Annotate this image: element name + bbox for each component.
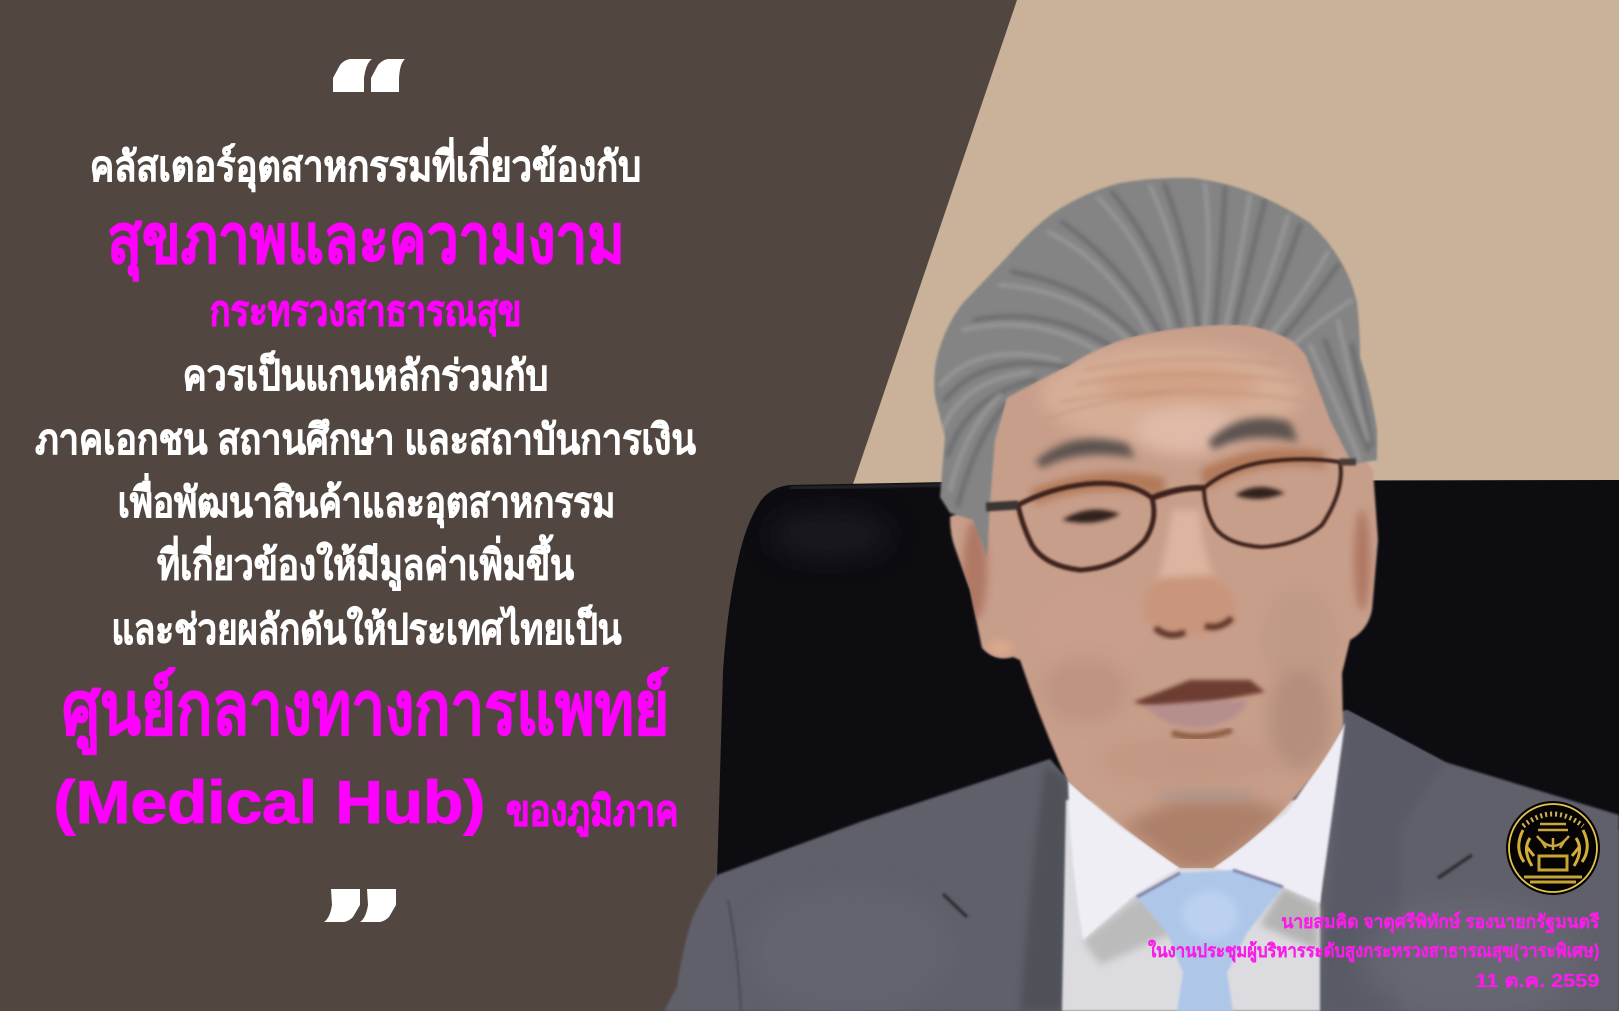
line 6: เพื่อพัฒนาสินค้าและอุตสาหกรรม <box>118 472 615 528</box>
necktie <box>1137 870 1283 1011</box>
seal base <box>1524 856 1582 882</box>
suit <box>664 705 1619 1011</box>
line 10: Medical Hub: (Medical Hub) <box>54 769 485 836</box>
line 10: region: ของภูมิภาค <box>506 788 678 837</box>
line 8: และช่วยผลักดันให้ประเทศไทยเป็น <box>112 603 622 652</box>
eyes <box>1062 487 1285 523</box>
caption: speaker and event <box>1148 911 1599 991</box>
photo: deputy prime minister portrait <box>664 178 1619 1011</box>
line 3: ministry: กระทรวงสาธารณสุข <box>210 288 521 337</box>
shirt <box>1062 723 1345 1011</box>
opening quotation mark <box>333 59 405 92</box>
mouth <box>1133 680 1265 737</box>
eyeglasses <box>986 459 1356 570</box>
face and ears <box>950 290 1378 870</box>
background: beige diagonal panel <box>851 0 1619 490</box>
caption line 1: นายสมคิด จาตุศรีพิทักษ์ รองนายกรัฐมนตรี <box>1281 911 1599 934</box>
line 9: highlight: ศูนย์กลางทางการแพทย์ <box>62 667 669 755</box>
caption line 3: date: 11 ต.ค. 2559 <box>1475 970 1599 991</box>
line 7: ที่เกี่ยวข้องให้มีมูลค่าเพิ่มขึ้น <box>157 534 574 591</box>
quote text block <box>35 137 696 837</box>
seal top inscription <box>1523 814 1583 826</box>
chair <box>717 480 1619 880</box>
line 4: ควรเป็นแกนหลักร่วมกับ <box>183 349 548 398</box>
eyebrows <box>1035 418 1298 468</box>
line 2: highlight: สุขภาพและความงาม <box>107 201 625 281</box>
emblem: cabinet seal <box>1506 801 1600 895</box>
seal central bowl <box>1537 824 1569 850</box>
line 1: คลัสเตอร์อุตสาหกรรมที่เกี่ยวข้องกับ <box>90 137 641 193</box>
closing quotation mark <box>324 889 396 922</box>
nose <box>1144 575 1236 636</box>
seal side guardians <box>1519 830 1587 866</box>
hair <box>934 178 1377 557</box>
line 5: ภาคเอกชน สถานศึกษา และสถาบันการเงิน <box>35 416 696 462</box>
